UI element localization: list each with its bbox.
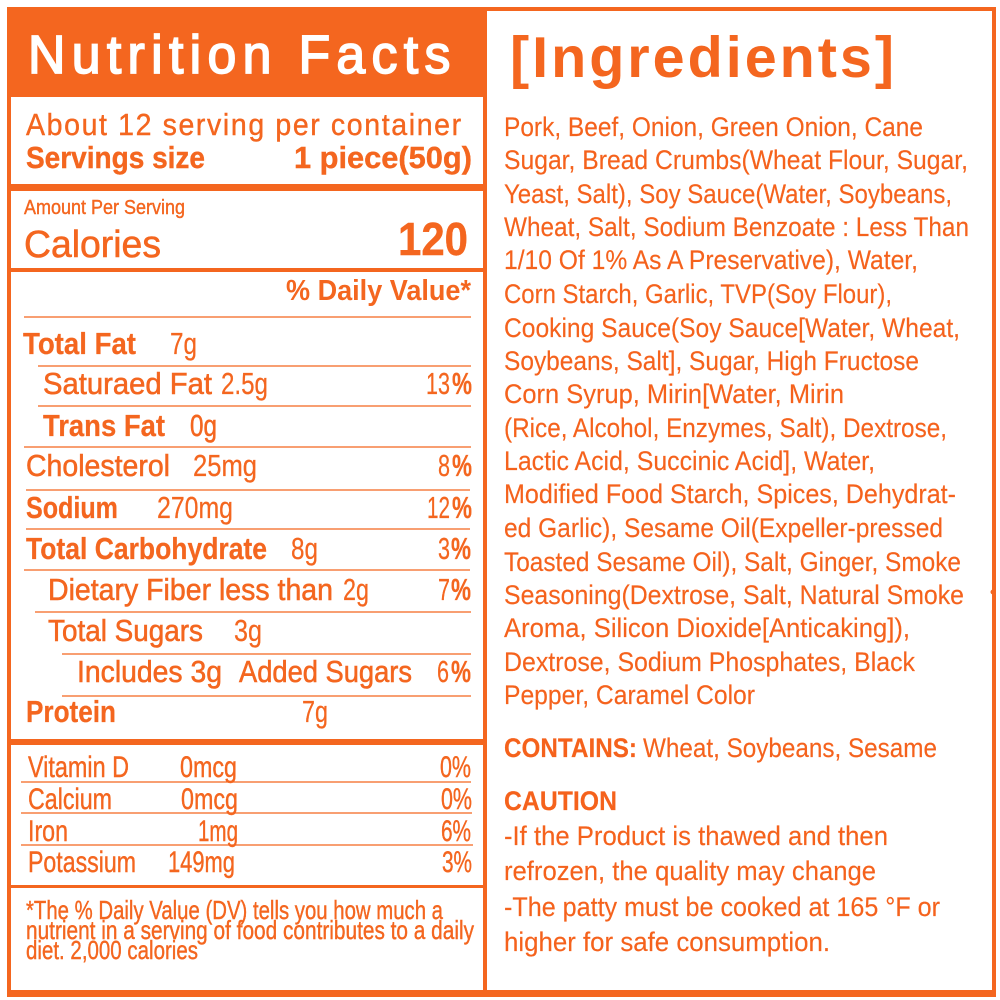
ingredients list: [504, 112, 969, 710]
ingredients list: Wheat, Salt, Sodium Benzoate : Less Than: [504, 212, 969, 242]
row: protein: Protein: [26, 695, 116, 729]
servings block: 1 piece(50g): [294, 140, 472, 175]
row: vitamin D: Vitamin D: [28, 751, 129, 784]
calories block: Calories: [24, 224, 161, 266]
ingredients list: Pork, Beef, Onion, Green Onion, Cane: [504, 112, 923, 142]
row: cholesterol: [26, 449, 472, 483]
footnote: nutrient in a serving of food contributes to a daily: [26, 915, 474, 945]
row: potassium: Potassium: [28, 846, 136, 879]
caution block: CAUTION: [504, 786, 617, 816]
row: sodium: Sodium: [26, 491, 118, 525]
row: saturated fat: 13: [426, 367, 450, 401]
servings block: Servings size: [26, 140, 205, 175]
row: total carbohydrate: 3: [438, 532, 450, 566]
row: added sugars: Includes 3g: [77, 655, 222, 689]
ingredients list: ed Garlic), Sesame Oil(Expeller-pressed: [504, 513, 943, 543]
row: iron: 6%: [441, 815, 471, 848]
ingredients list: 1/10 Of 1% As A Preservative), Water,: [504, 245, 918, 275]
row: sodium: 12: [427, 491, 450, 525]
row: dietary fiber: %: [451, 573, 471, 607]
footnote: *The % Daily Value (DV) tells you how much a: [26, 895, 443, 925]
row: vitamin D: 0%: [440, 751, 471, 784]
row: trans fat: Trans Fat: [43, 409, 165, 443]
row: added sugars: [77, 655, 471, 689]
calories block: [24, 197, 468, 266]
contains statement: Wheat, Soybeans, Sesame: [643, 733, 937, 763]
row: cholesterol: %: [452, 449, 472, 483]
row: iron: [28, 815, 471, 848]
row: sodium: [26, 491, 472, 525]
row: saturated fat: 2.5g: [221, 367, 268, 401]
row: protein: [26, 695, 328, 729]
calories block: Amount Per Serving: [24, 197, 185, 219]
caution block: refrozen, the quality may change: [504, 856, 876, 886]
ingredients list: Aroma, Silicon Dioxide[Anticaking]),: [504, 613, 910, 643]
row: cholesterol: 25mg: [193, 449, 257, 483]
row: calcium: 0mcg: [181, 783, 238, 816]
ingredients list: Modified Food Starch, Spices, Dehydrat-: [504, 479, 956, 509]
row: total sugars: 3g: [234, 614, 262, 648]
row: calcium: 0%: [441, 783, 472, 816]
row: total fat: Total Fat: [23, 327, 136, 361]
row: calcium: [28, 783, 472, 816]
ingredients list: (Rice, Alcohol, Enzymes, Salt), Dextrose,: [504, 413, 947, 443]
row: vitamin D: [28, 751, 471, 784]
calories block: 120: [398, 213, 468, 265]
row: trans fat: 0g: [190, 409, 217, 443]
row: calcium: Calcium: [28, 783, 112, 816]
row: sodium: %: [452, 491, 472, 525]
row: total carbohydrate: %: [451, 532, 471, 566]
footnote: [26, 895, 474, 965]
row: total carbohydrate: 8g: [291, 532, 318, 566]
vitamins and minerals table: [21, 751, 473, 879]
row: vitamin D: 0mcg: [180, 751, 237, 784]
panel: ingredients: [487, 7, 996, 997]
caution block: higher for safe consumption.: [504, 927, 830, 957]
daily value heading: % Daily Value*: [286, 275, 472, 307]
contains statement: CONTAINS:: [504, 733, 637, 763]
row: sodium: 270mg: [157, 491, 233, 525]
caution block: -If the Product is thawed and then: [504, 821, 888, 851]
row: saturated fat: [43, 367, 472, 401]
row: potassium: [28, 846, 472, 879]
heading: Ingredients: [Ingredients]: [510, 26, 894, 90]
row: total carbohydrate: [26, 532, 471, 566]
ingredients list: Yeast, Salt), Soy Sauce(Water, Soybeans,: [504, 179, 952, 209]
ingredients list: Corn Starch, Garlic, TVP(Soy Flour),: [504, 279, 892, 309]
row: iron: 1mg: [198, 815, 238, 848]
caution block: [504, 786, 940, 957]
row: total fat: 7g: [170, 327, 197, 361]
ingredients list: Lactic Acid, Succinic Acid], Water,: [504, 446, 875, 476]
ingredients list: Corn Syrup, Mirin[Water, Mirin: [504, 379, 844, 409]
row: added sugars: Added Sugars: [239, 655, 412, 689]
ingredients list: Toasted Sesame Oil), Salt, Ginger, Smoke: [504, 547, 961, 577]
row: protein: 7g: [302, 695, 328, 729]
row: saturated fat: %: [452, 367, 472, 401]
ingredients list: Sugar, Bread Crumbs(Wheat Flour, Sugar,: [504, 145, 968, 175]
ingredients list: Pepper, Caramel Color: [504, 680, 755, 710]
footnote: diet. 2,000 calories: [26, 935, 198, 965]
ingredients list: Soybeans, Salt], Sugar, High Fructose: [504, 346, 919, 376]
servings block: [26, 108, 472, 175]
row: added sugars: 6: [437, 655, 449, 689]
row: dietary fiber: 2g: [343, 573, 369, 607]
caution block: -The patty must be cooked at 165 °F or: [504, 892, 940, 922]
row: iron: Iron: [28, 815, 68, 848]
row: total carbohydrate: Total Carbohydrate: [26, 532, 267, 566]
ingredients list: Cooking Sauce(Soy Sauce[Water, Wheat,: [504, 313, 960, 343]
nutrient table: [23, 317, 472, 729]
contains statement: [504, 733, 937, 763]
row: dietary fiber: Dietary Fiber less than: [48, 573, 333, 607]
row: potassium: 149mg: [168, 846, 235, 879]
row: cholesterol: Cholesterol: [26, 449, 170, 483]
ingredients list: Seasoning(Dextrose, Salt, Natural Smoke: [504, 580, 964, 610]
row: total sugars: Total Sugars: [48, 614, 203, 648]
panel: nutrition facts: [7, 7, 487, 997]
row: cholesterol: 8: [438, 449, 450, 483]
servings block: About 12 serving per container: [26, 108, 461, 142]
row: saturated fat: Saturaed Fat: [43, 367, 213, 401]
ingredients list: Dextrose, Sodium Phosphates, Black: [504, 647, 916, 677]
row: potassium: 3%: [442, 846, 472, 879]
heading: Nutrition Facts: Nutrition Facts: [28, 25, 450, 85]
row: added sugars: %: [451, 655, 471, 689]
row: dietary fiber: 7: [438, 573, 450, 607]
